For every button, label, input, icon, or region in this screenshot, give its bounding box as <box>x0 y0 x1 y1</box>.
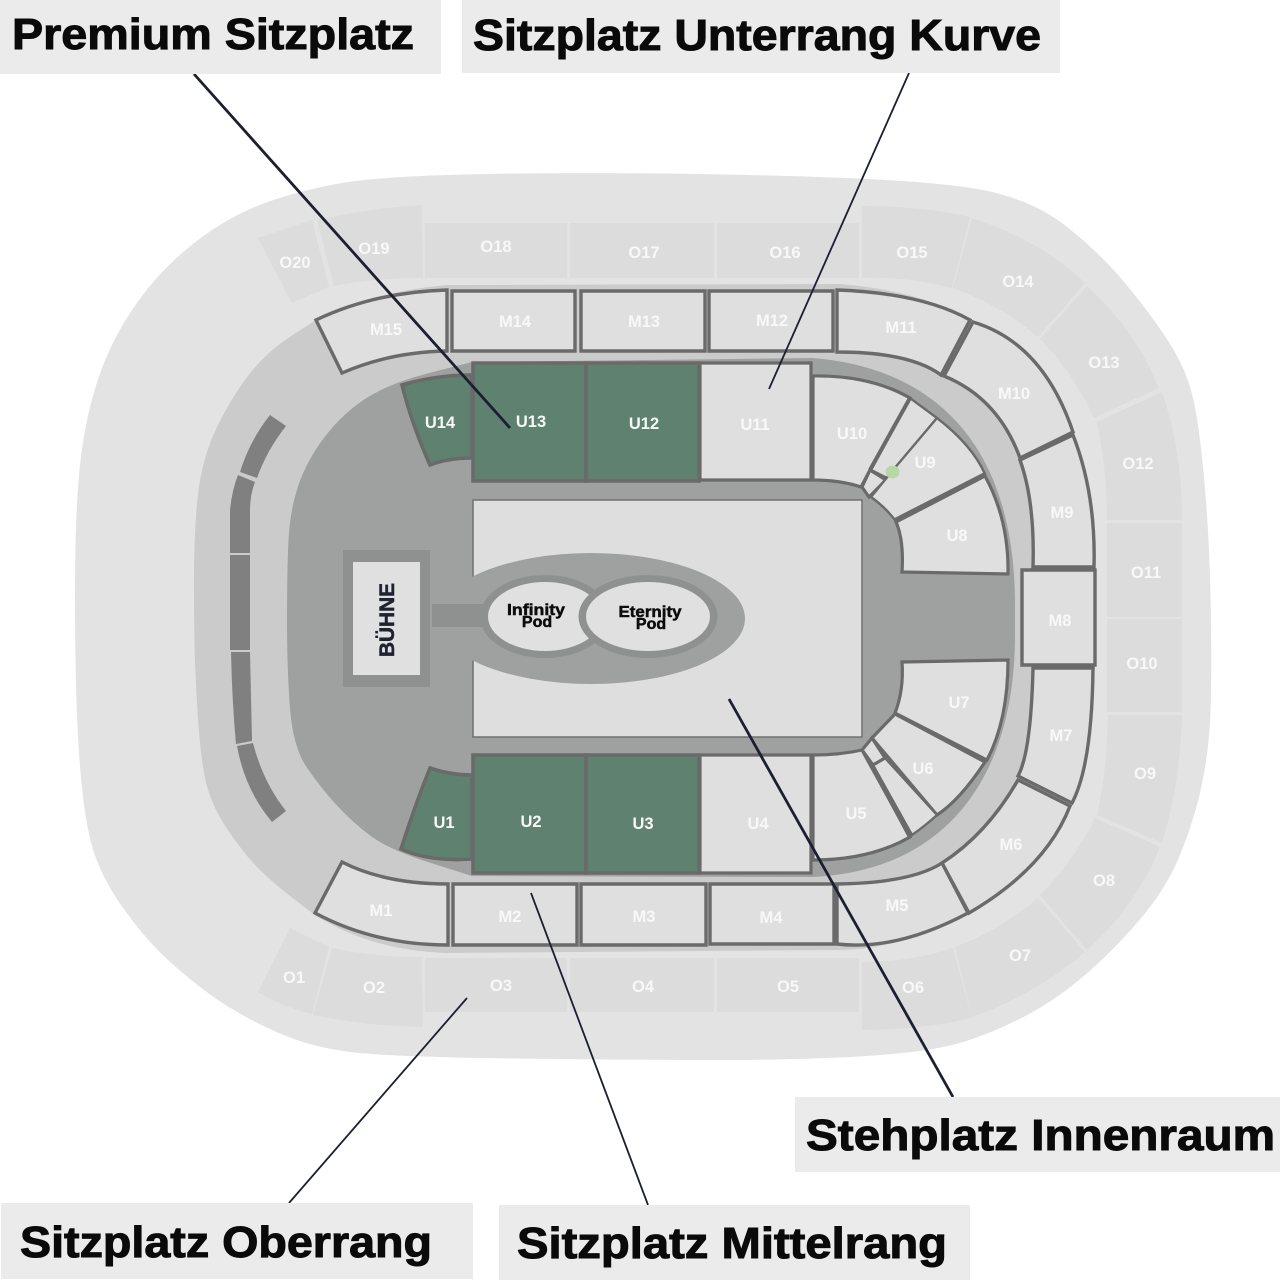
section U1 <box>401 768 472 860</box>
label: Sitzplatz Unterrang Kurve <box>462 0 1060 73</box>
section M4: M4 <box>760 909 783 927</box>
section O14: O14 <box>1002 273 1034 291</box>
stage label: BÜHNE <box>376 583 399 657</box>
section M15 <box>316 290 447 373</box>
section U9 <box>871 418 985 520</box>
section O20 <box>258 220 329 303</box>
premium sections <box>401 363 699 873</box>
eternity pod: Eternity <box>618 604 682 621</box>
section O7 <box>955 898 1085 1017</box>
section U9: U9 <box>914 454 936 472</box>
section O3: O3 <box>490 977 512 995</box>
catwalk oval <box>437 553 745 684</box>
section O11 <box>1107 523 1182 617</box>
section U4: U4 <box>747 815 769 833</box>
section O10: O10 <box>1126 655 1158 673</box>
middle tier sections <box>315 290 1095 945</box>
label: Premium Sitzplatz: Premium Sitzplatz <box>12 10 414 59</box>
section M11: M11 <box>885 319 917 337</box>
section O9: O9 <box>1134 765 1156 783</box>
label: Sitzplatz Unterrang Kurve: Sitzplatz Unterrang Kurve <box>473 11 1041 60</box>
sliver of U9 <box>871 398 937 478</box>
section U7 <box>895 660 1008 760</box>
section U1: U1 <box>433 814 455 832</box>
section U11: U11 <box>740 416 770 434</box>
section O1 <box>258 928 329 1014</box>
infinity pod <box>480 575 610 658</box>
section O5: O5 <box>777 978 799 996</box>
section O8: O8 <box>1093 872 1115 890</box>
wedge between U6 and U5 <box>862 738 885 765</box>
section M1: M1 <box>370 902 392 920</box>
section O13 <box>1040 286 1159 418</box>
section O19: O19 <box>358 240 390 258</box>
section M10 <box>944 322 1073 458</box>
section M2: M2 <box>499 908 521 926</box>
divider U6 U5 <box>873 768 910 837</box>
divider U10 U9 <box>870 398 910 470</box>
section O16: O16 <box>769 244 801 262</box>
section M7 <box>1018 668 1093 803</box>
section M3: M3 <box>633 908 655 926</box>
section M14 <box>452 291 575 351</box>
section U3 <box>586 755 699 873</box>
label: Sitzplatz Oberrang: Sitzplatz Oberrang <box>20 1218 432 1267</box>
section U5: U5 <box>845 805 867 823</box>
section O16 <box>717 223 859 278</box>
section O2 <box>313 948 423 1027</box>
infinity pod: Pod <box>522 614 552 631</box>
section U3: U3 <box>632 815 654 833</box>
section M10: M10 <box>998 385 1030 403</box>
section M8 <box>1022 570 1095 665</box>
section U4 <box>700 755 811 873</box>
section O3 <box>425 958 567 1012</box>
concourse ring <box>194 284 1094 953</box>
section U12 <box>586 363 699 481</box>
section M5 <box>837 863 968 945</box>
section O17: O17 <box>628 244 660 262</box>
lower tier sections, plain <box>700 363 1008 873</box>
label: Premium Sitzplatz <box>0 0 441 74</box>
section M14: M14 <box>499 313 532 331</box>
section M6 <box>942 780 1070 913</box>
section U10: U10 <box>837 425 867 443</box>
section O1: O1 <box>283 969 305 987</box>
section M12 <box>709 291 833 351</box>
section O8 <box>1040 818 1160 950</box>
rear tier segments <box>230 415 286 822</box>
section O17 <box>570 223 714 278</box>
section O13: O13 <box>1088 354 1120 372</box>
section U8 <box>896 476 1008 574</box>
section U13 <box>473 363 586 481</box>
arena outer shell <box>75 173 1211 1060</box>
infinity pod: Infinity <box>507 602 565 619</box>
accessible marker <box>886 466 900 478</box>
section O18 <box>425 223 567 278</box>
section O15: O15 <box>896 244 928 262</box>
section M9 <box>1020 435 1094 567</box>
section O6 <box>862 948 972 1030</box>
section U13: U13 <box>516 413 546 431</box>
section U2: U2 <box>520 813 542 831</box>
divider U9 U8 <box>895 474 985 520</box>
section O14 <box>953 218 1085 337</box>
leader line: Sitzplatz Unterrang Kurve <box>769 73 909 389</box>
section M2 <box>453 884 577 945</box>
stage <box>343 550 430 687</box>
section U5 <box>813 750 910 860</box>
section O2: O2 <box>363 979 385 997</box>
section U11 <box>700 363 811 480</box>
section O4 <box>570 958 714 1012</box>
section U14: U14 <box>425 414 456 432</box>
leader line: Premium Sitzplatz <box>194 74 510 428</box>
section U6 <box>872 714 985 815</box>
interior floor <box>287 358 1015 877</box>
sliver of U6 <box>873 758 937 835</box>
label: Stehplatz Innenraum: Stehplatz Innenraum <box>806 1111 1275 1160</box>
section M7: M7 <box>1050 727 1072 745</box>
eternity pod <box>578 575 718 658</box>
section M8: M8 <box>1049 612 1071 630</box>
section M5: M5 <box>886 897 908 915</box>
standing floor <box>473 500 862 737</box>
section O9 <box>1097 715 1182 843</box>
section O12: O12 <box>1122 455 1154 473</box>
section M13 <box>581 291 705 351</box>
section U2 <box>473 755 586 873</box>
section M9: M9 <box>1051 504 1073 522</box>
section M13: M13 <box>628 313 660 331</box>
leader line: Stehplatz Innenraum <box>729 699 953 1097</box>
section O4: O4 <box>632 978 655 996</box>
section O12 <box>1097 392 1182 520</box>
section U14 <box>402 375 472 465</box>
label: Stehplatz Innenraum <box>795 1097 1280 1172</box>
section M3 <box>581 884 706 945</box>
section O20: O20 <box>279 254 311 272</box>
leader line: Sitzplatz Mittelrang <box>531 893 648 1205</box>
section O5 <box>717 958 859 1012</box>
section U10 <box>813 376 910 487</box>
section O6: O6 <box>902 979 924 997</box>
upper tier sections <box>258 205 1182 1030</box>
section O15 <box>862 206 970 288</box>
section O11: O11 <box>1131 564 1161 582</box>
section M11 <box>837 290 970 375</box>
catwalk connector <box>432 604 488 627</box>
section O10 <box>1107 619 1182 712</box>
section M6: M6 <box>1000 836 1022 854</box>
section M1 <box>315 862 448 945</box>
section O19 <box>317 205 423 286</box>
section M12: M12 <box>756 312 788 330</box>
eternity pod: Pod <box>636 616 666 633</box>
section M15: M15 <box>370 321 402 339</box>
section O7: O7 <box>1009 947 1031 965</box>
wedge between U10 and U9 <box>862 470 886 497</box>
section U8: U8 <box>946 527 968 545</box>
section O18: O18 <box>480 238 512 256</box>
label: Sitzplatz Oberrang <box>1 1203 473 1279</box>
label: Sitzplatz Mittelrang: Sitzplatz Mittelrang <box>517 1219 947 1268</box>
section M4 <box>710 884 834 944</box>
leader line: Sitzplatz Oberrang <box>289 998 467 1203</box>
section U12: U12 <box>629 415 659 433</box>
label: Sitzplatz Mittelrang <box>499 1205 970 1280</box>
section U7: U7 <box>948 694 970 712</box>
section U6: U6 <box>912 760 934 778</box>
